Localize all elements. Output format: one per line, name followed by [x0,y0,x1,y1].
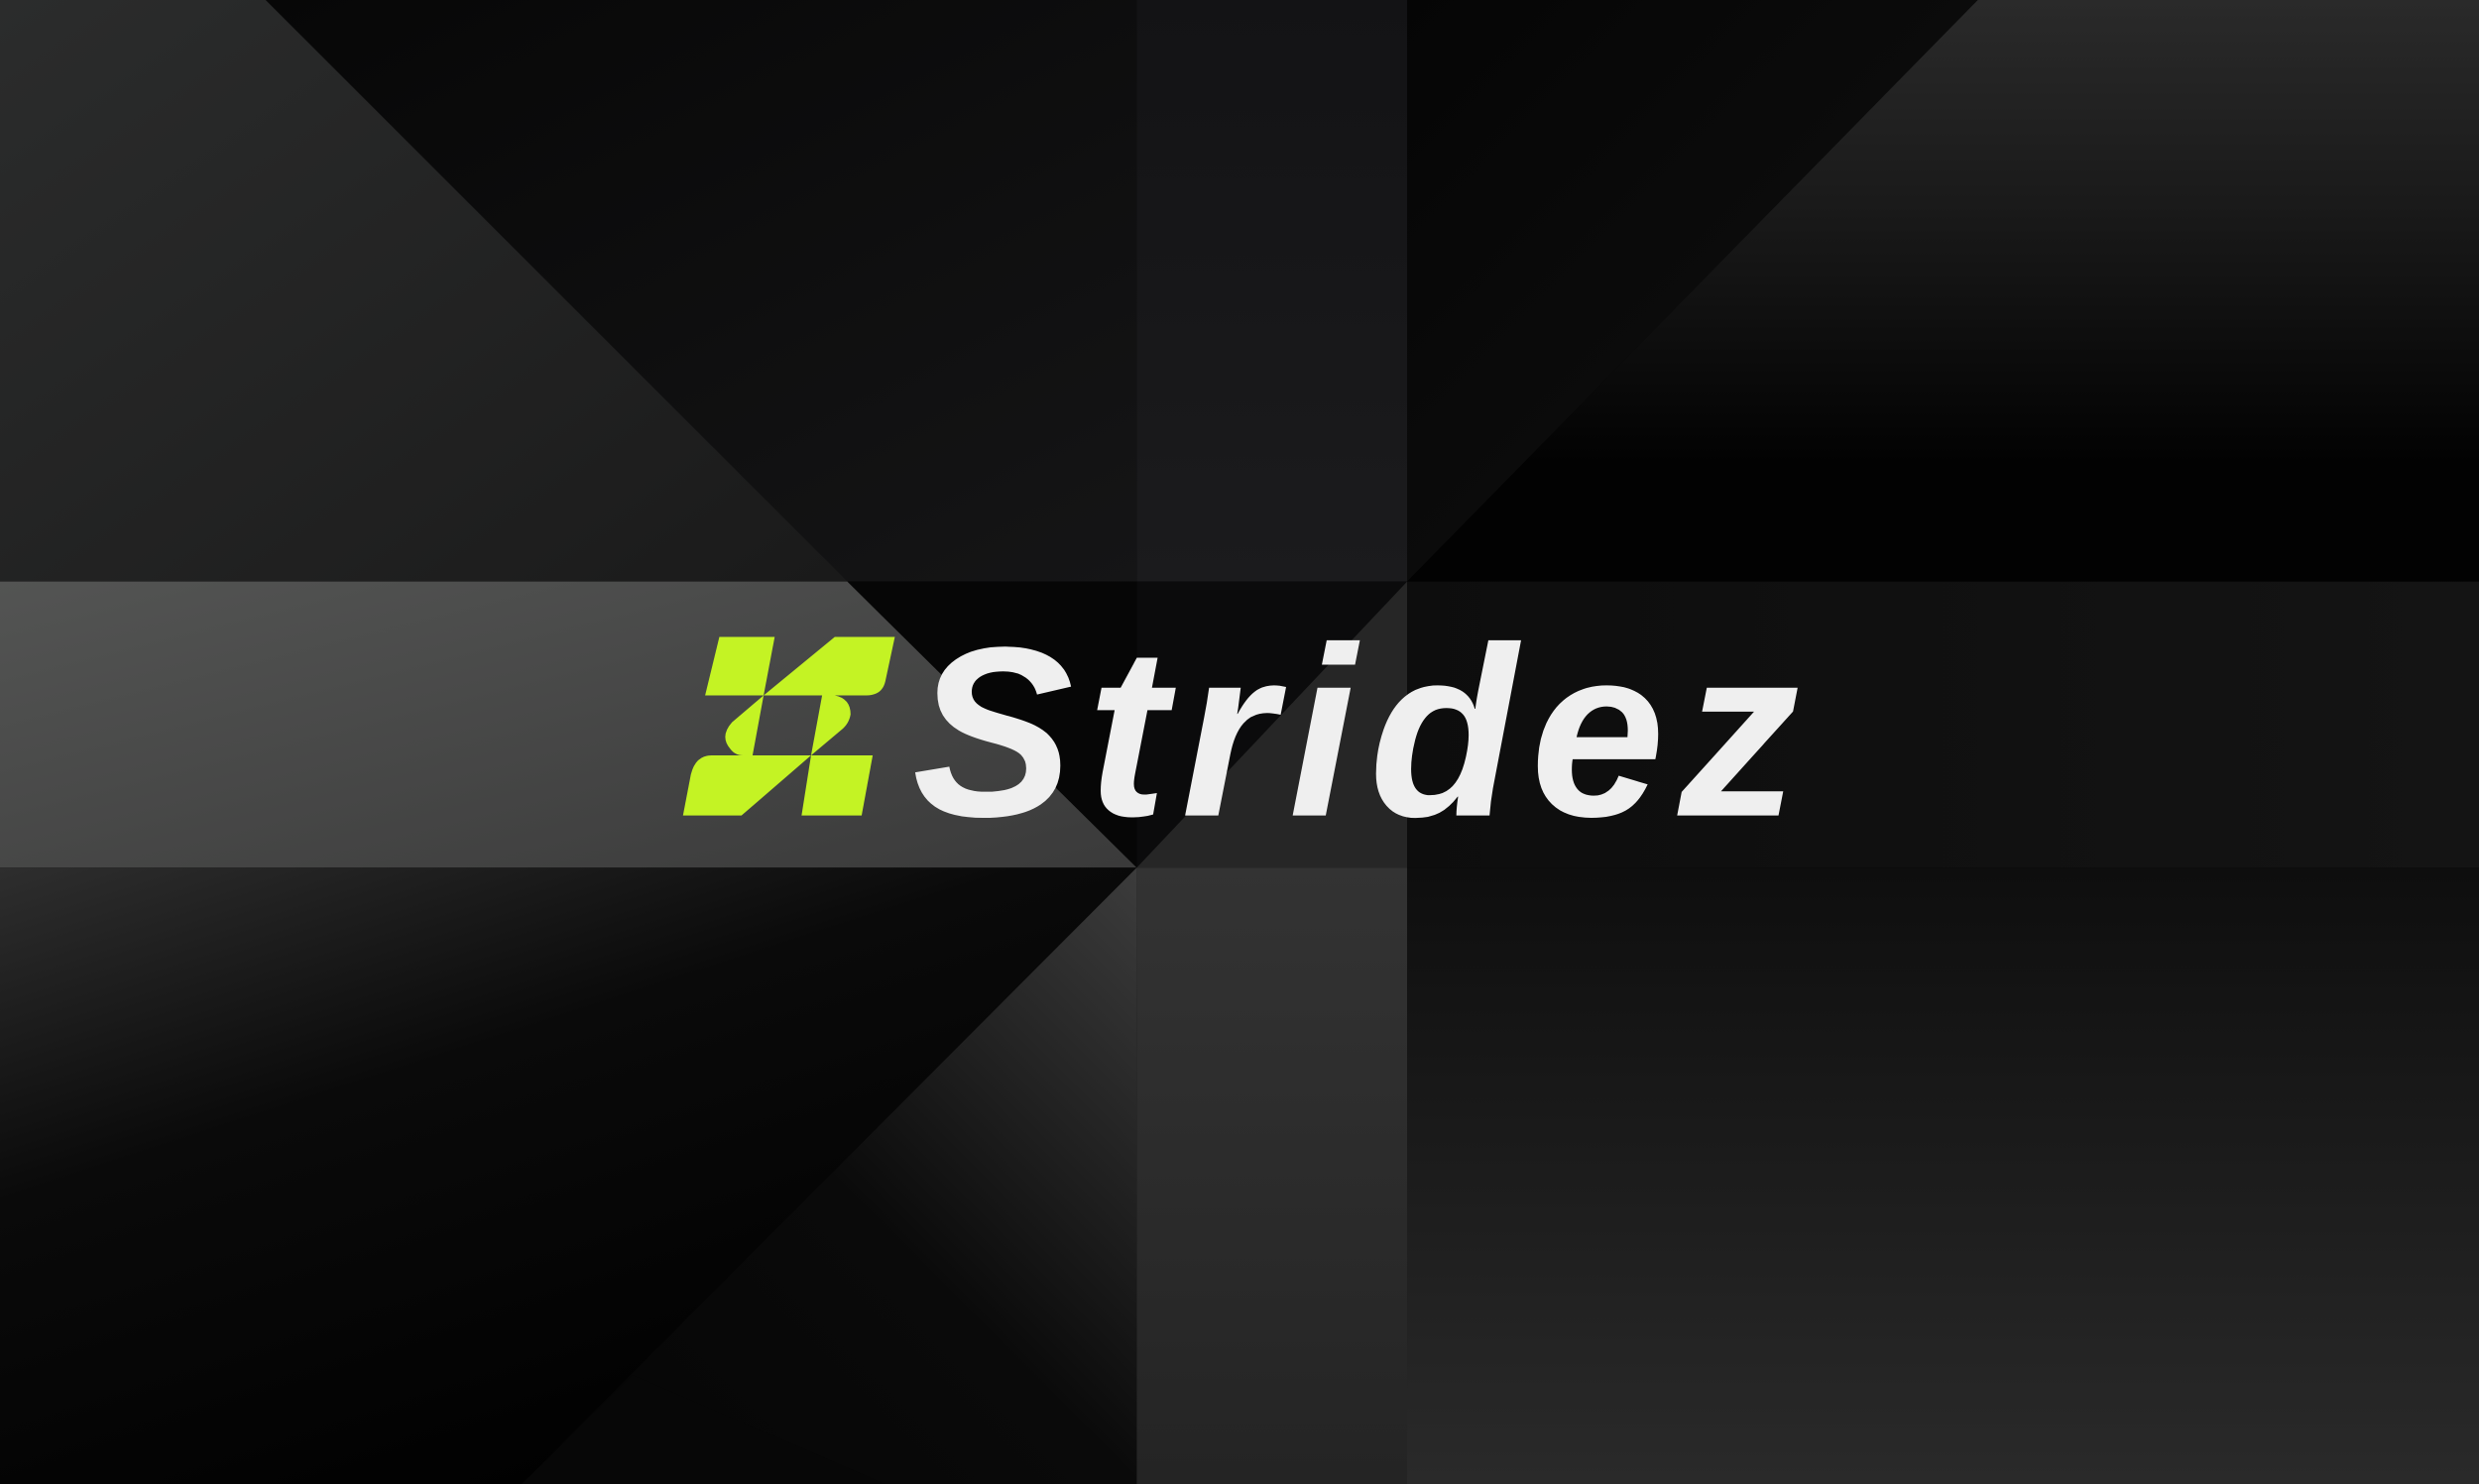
icon: logo mark [683,636,894,816]
logo [683,597,1813,867]
wordmark: Stridez [912,597,1813,867]
